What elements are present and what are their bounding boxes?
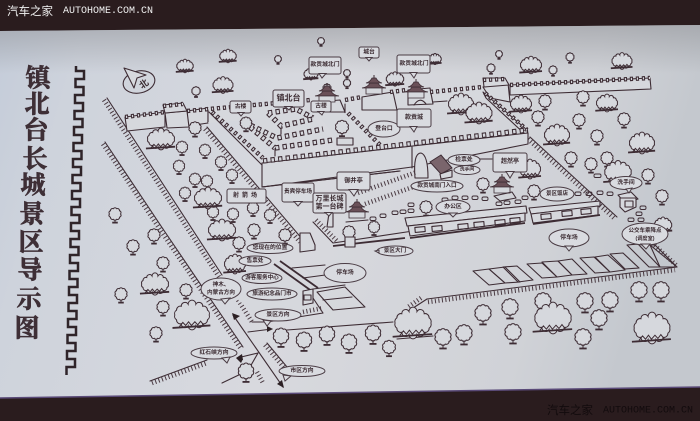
bottom watermark: 汽车之家 — [547, 403, 593, 417]
callout: 检票处: 检票处 — [455, 155, 473, 163]
callout: 洗手间 — [610, 176, 642, 193]
callout: 射箭场 — [227, 189, 266, 203]
title: vertical heading: 北 — [24, 92, 50, 118]
main ground trees — [109, 117, 395, 382]
icon: north compass — [121, 68, 157, 96]
callout: 停车场 left: 停车场 — [336, 268, 354, 276]
callout: 超然亭 — [493, 153, 527, 178]
pagoda towers — [315, 75, 428, 102]
callout: 景区方向 — [255, 309, 301, 326]
callout: 洗手间 small — [454, 166, 480, 174]
callout: 款贡城南门入口: 款贡城南门入口 — [417, 181, 457, 189]
callout: 售票处: 售票处 — [247, 256, 264, 264]
callout: 神木、内蒙古方向: 内蒙古方向 — [207, 288, 235, 296]
callout: 公交车乘降点: 公交车乘降点 — [628, 226, 662, 234]
top watermark: 汽车之家 — [7, 4, 53, 18]
callout: 款贡城北门 right: 款贡城北门 — [400, 59, 429, 67]
callout: 市区方向 — [279, 366, 325, 381]
callout: 公交车乘降点: (调度室) — [635, 234, 655, 242]
stone paths — [370, 174, 646, 222]
icon: north compass: 北 — [137, 76, 151, 91]
callout: 洗手间: 洗手间 — [617, 178, 635, 186]
callout: 景区大门: 景区大门 — [384, 246, 407, 254]
title: vertical heading: 导 — [17, 256, 43, 284]
callout: 景区饭店: 景区饭店 — [546, 189, 568, 197]
callout: 办公区 — [436, 200, 470, 217]
callout: 古楼 left — [230, 101, 251, 116]
callout: 贵宾停车场: 贵宾停车场 — [284, 187, 312, 195]
callout: 超然亭: 超然亭 — [501, 157, 519, 165]
ticket gate building — [430, 155, 452, 179]
title: vertical heading: 长 — [22, 146, 48, 174]
callout: 神木、内蒙古方向: 神木、 — [213, 280, 229, 288]
title: vertical heading: 城 — [20, 172, 46, 200]
callout: 景区方向: 景区方向 — [266, 310, 290, 318]
right side trees — [420, 91, 672, 233]
callout: 款贡城: 款贡城 — [405, 113, 423, 121]
callout: 款贡城北门 right — [397, 55, 430, 78]
callout: 御井亭 — [337, 172, 370, 196]
small sign — [337, 138, 353, 145]
callout: 城台 — [359, 47, 379, 61]
callout: 万里长城第一台碑 — [313, 193, 346, 216]
title: vertical heading: 区 — [18, 228, 44, 256]
callout: 您现在的位置: 您现在的位置 — [253, 243, 288, 251]
callout: 神木、内蒙古方向 — [201, 278, 241, 304]
callout: 停车场 right: 停车场 — [560, 233, 578, 241]
callout: 镇北台 — [273, 90, 304, 110]
callout: 镇北台: 镇北台 — [276, 92, 300, 102]
callout: 古楼 left: 古楼 — [235, 102, 246, 110]
callout: 城台: 城台 — [363, 48, 375, 56]
callout: 红石峡方向: 红石峡方向 — [200, 348, 229, 356]
title: vertical heading: 景 — [19, 200, 45, 228]
top watermark — [7, 4, 153, 18]
callout: 射箭场: 射箭场 — [233, 191, 260, 199]
callout: 市区方向: 市区方向 — [290, 366, 314, 374]
callout: 款贡城南门入口 — [411, 180, 463, 192]
callout: 景区大门 — [375, 246, 413, 256]
callout: 旅游纪念品门市 — [247, 288, 297, 300]
callout: 旅游纪念品门市: 旅游纪念品门市 — [252, 289, 292, 297]
pavilions — [345, 174, 516, 222]
callout: 登台口: 登台口 — [375, 124, 393, 132]
title: vertical heading: 图 — [14, 314, 40, 342]
callout: 古楼 right — [311, 101, 331, 115]
road with direction arrows — [232, 313, 284, 388]
courtyard approach and platform — [262, 171, 417, 247]
building: scenic restaurant — [529, 201, 600, 224]
callout: 景区饭店 — [540, 187, 574, 201]
callout: 停车场 right — [549, 229, 589, 251]
building: long office block — [405, 206, 527, 238]
bottom watermark: AUTOHOME.COM.CN — [603, 406, 693, 416]
callout: 游客服务中心 — [242, 272, 282, 284]
callout: 您现在的位置 — [247, 242, 293, 254]
parking bays — [473, 244, 677, 285]
title: vertical heading: 示 — [16, 286, 43, 314]
callout: 古楼 right: 古楼 — [315, 102, 327, 110]
lower right trees — [393, 282, 671, 348]
fort walls and battlements — [125, 78, 651, 187]
callout: 贵宾停车场 — [282, 183, 314, 206]
visitor centre area and parking — [238, 233, 365, 322]
callout: 登台口 — [368, 121, 400, 137]
callout: 售票处 — [239, 256, 271, 266]
callout: 万里长城第一台碑: 万里长城 — [316, 194, 344, 202]
top watermark: AUTOHOME.COM.CN — [63, 6, 153, 17]
trees behind the wall — [176, 37, 632, 97]
callout: 御井亭: 御井亭 — [344, 176, 363, 184]
callout: 公交车乘降点 — [622, 223, 668, 249]
title: vertical heading: 镇 — [25, 64, 53, 92]
callout: 检票处 — [448, 154, 492, 166]
callout: 万里长城第一台碑: 第一台碑 — [316, 202, 344, 210]
callout: 停车场 left — [324, 264, 366, 282]
callout: 洗手间 small: 洗手间 — [460, 166, 474, 172]
callout: 游客服务中心: 游客服务中心 — [245, 273, 279, 281]
callout: 款贡城 — [397, 109, 431, 132]
title: vertical heading: 台 — [23, 116, 49, 144]
callout: 办公区: 办公区 — [444, 202, 462, 210]
building: washroom — [618, 192, 638, 212]
greek key border — [66, 66, 84, 375]
callout: 红石峡方向 — [191, 347, 237, 363]
bottom watermark — [547, 403, 693, 417]
hatched site boundaries — [103, 98, 677, 383]
callout: 款贡城北门 left — [309, 57, 341, 78]
callout: 款贡城北门 left: 款贡城北门 — [310, 60, 340, 68]
title: vertical heading — [14, 64, 53, 342]
